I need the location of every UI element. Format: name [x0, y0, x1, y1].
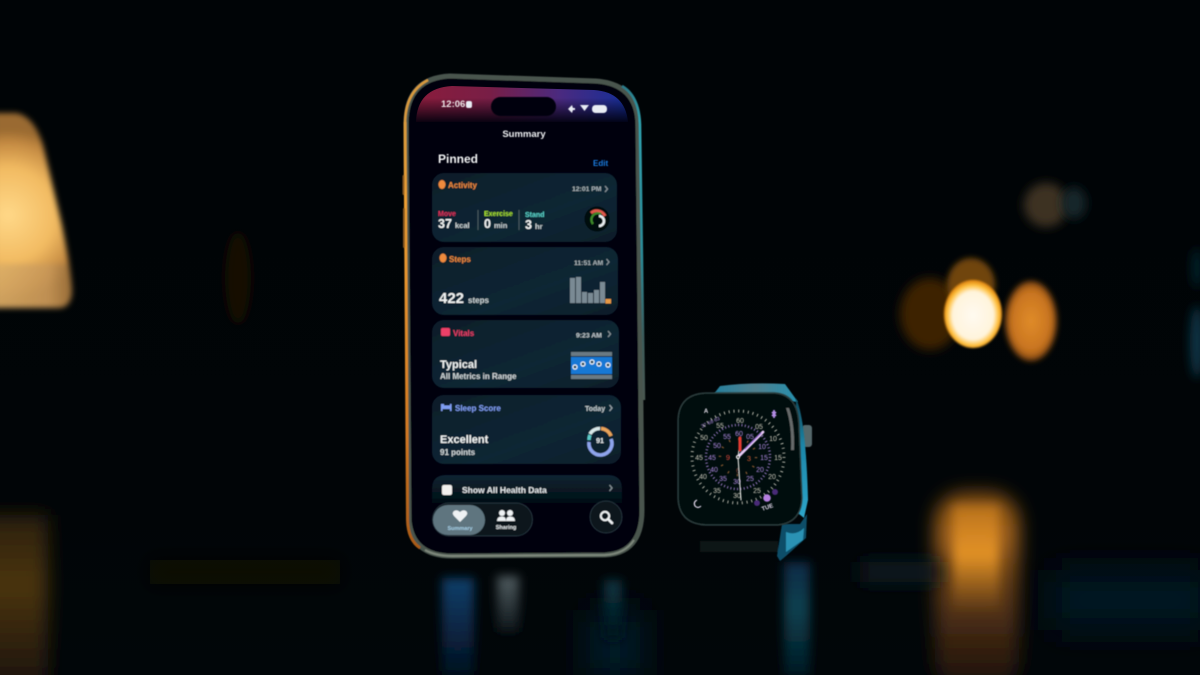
- watch case: [678, 393, 808, 525]
- watch band bottom: [700, 514, 807, 561]
- card: steps: Steps: [449, 255, 471, 264]
- inner minutes numerals: 40: [710, 467, 718, 474]
- tab: sharing: Sharing: [496, 525, 516, 531]
- hour numerals: [726, 453, 751, 475]
- edit link: Edit: [593, 159, 608, 168]
- status bar colour glow: [416, 86, 628, 122]
- bokeh lights on the right: [900, 183, 1200, 378]
- inner minutes numerals: 45: [708, 455, 716, 462]
- watch: [678, 383, 812, 561]
- card: vitals: Vitals: [453, 329, 475, 338]
- top-right complication: [772, 410, 776, 418]
- header title: Summary: [502, 129, 546, 140]
- outer seconds numerals: 25: [753, 488, 761, 495]
- phone: [402, 76, 644, 556]
- outer seconds numerals: 15: [774, 455, 782, 462]
- top-left complication: A: [704, 409, 709, 415]
- card: steps: 11:51 AM: [574, 260, 604, 267]
- card: activity: Move: [438, 211, 456, 218]
- icon: vitals: [441, 328, 450, 336]
- card: activity: 0: [484, 217, 491, 231]
- card: activity: Exercise: [484, 211, 513, 218]
- complication arc text: 37·68·63: [700, 416, 721, 430]
- tab bar: [432, 503, 532, 536]
- lamp, blurred on the left: [0, 113, 72, 308]
- watch band top: [713, 383, 798, 402]
- pinned heading: Pinned: [438, 152, 478, 166]
- hour numerals: 6: [736, 466, 740, 475]
- inner minutes numerals: 15: [760, 455, 768, 462]
- steps bar chart: [570, 277, 611, 304]
- dim amber background light: [225, 232, 251, 324]
- outer seconds numerals: 55: [716, 423, 724, 430]
- icon: health app: [442, 485, 452, 495]
- watch crown: [802, 425, 812, 447]
- dynamic island: [491, 97, 556, 116]
- outer seconds numerals: 50: [700, 435, 708, 442]
- outer seconds numerals: 10: [769, 436, 777, 443]
- card: steps: [432, 247, 618, 315]
- card: sleep score: Sleep Score: [455, 404, 501, 413]
- outer seconds numerals: 40: [699, 474, 707, 481]
- card: show all health data: Show All Health Data: [462, 485, 547, 495]
- outer seconds numerals: 30: [733, 493, 741, 500]
- hour numerals: 3: [747, 454, 751, 463]
- inner minutes numerals: [708, 431, 768, 486]
- inner minutes numerals: 60: [735, 431, 743, 438]
- card: steps: steps: [468, 296, 489, 305]
- watch hands: [736, 432, 763, 500]
- inner minutes numerals: 30: [733, 479, 741, 486]
- card: activity: Activity: [448, 181, 477, 190]
- card: activity: [432, 173, 617, 242]
- outer seconds numerals: 60: [736, 418, 744, 425]
- card: activity: 12:01 PM: [572, 186, 602, 193]
- inner minutes numerals: 20: [756, 467, 764, 474]
- card: sleep score: 91 points: [440, 448, 476, 457]
- outer seconds numerals: [695, 418, 782, 500]
- watch dial: [692, 409, 784, 513]
- card: activity: hr: [535, 222, 543, 231]
- card: vitals: [432, 320, 619, 388]
- card: vitals: Typical: [440, 359, 477, 371]
- bottom-left complication: [694, 500, 701, 508]
- card: steps: 422: [439, 290, 464, 307]
- outer seconds numerals: 05: [755, 424, 763, 431]
- card: sleep score: Excellent: [440, 434, 489, 446]
- inner minutes numerals: 50: [713, 443, 721, 450]
- card: show all health data: [432, 475, 622, 503]
- card: vitals: All Metrics in Range: [440, 372, 517, 381]
- card: activity: 3: [525, 218, 532, 232]
- inner minutes numerals: 10: [758, 444, 766, 451]
- outer seconds numerals: 20: [768, 474, 776, 481]
- card: sleep score: [432, 395, 621, 464]
- card: vitals: 9:23 AM: [576, 332, 602, 340]
- inner minutes numerals: 55: [723, 434, 731, 441]
- icon: flame: [438, 180, 446, 189]
- active tab: summary: Summary: [447, 526, 473, 532]
- phone body and frame: [402, 76, 644, 556]
- sleep score ring: 91: [596, 438, 604, 445]
- icon: flame: [440, 254, 446, 262]
- card: activity: Stand: [525, 212, 544, 219]
- inner minutes numerals: 35: [719, 476, 727, 483]
- sleep score ring: [589, 428, 612, 455]
- card: activity: min: [494, 221, 508, 230]
- vitals range chart: [571, 352, 612, 379]
- card: sleep score: Today: [585, 406, 605, 413]
- hour numerals: 9: [726, 453, 730, 462]
- outer seconds numerals: 45: [695, 455, 703, 462]
- status time: 12:06: [441, 99, 465, 110]
- card: activity: 37: [438, 217, 452, 231]
- bottom-right day complication: TUE: [761, 503, 774, 513]
- inner minutes numerals: 25: [746, 476, 754, 483]
- inner minutes numerals: 05: [746, 434, 754, 441]
- outer seconds numerals: 35: [713, 488, 721, 495]
- search button: [590, 501, 622, 533]
- table reflections: [0, 492, 1200, 675]
- icon: bed: [441, 404, 452, 411]
- card: activity: kcal: [455, 221, 470, 230]
- activity rings: [584, 206, 610, 232]
- status icons: [466, 101, 607, 113]
